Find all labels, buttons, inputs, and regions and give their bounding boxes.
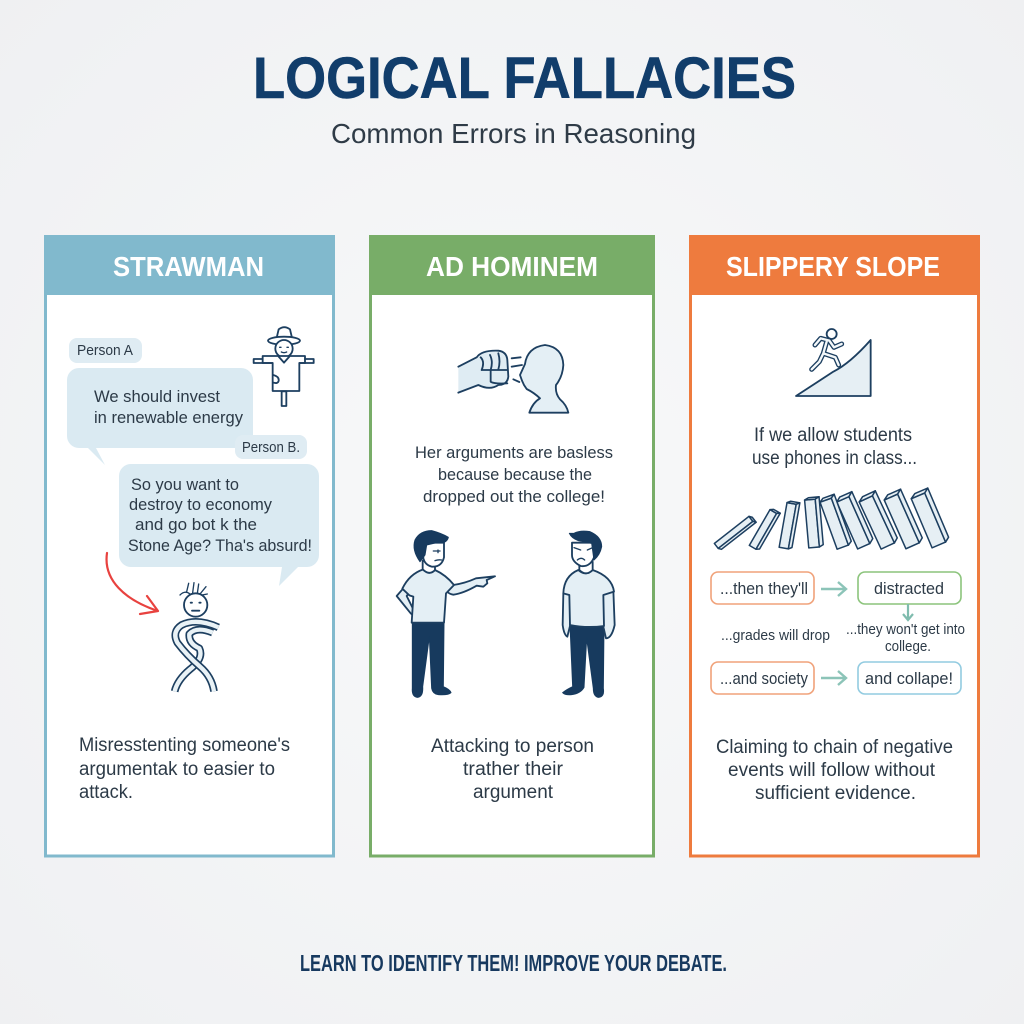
text: grades will drop: ...grades will drop (721, 627, 830, 644)
description: strawman: attack. (79, 782, 133, 803)
description: strawman: argumentak to easier to (79, 759, 275, 780)
speech bubble: person B: So you want to (131, 475, 239, 494)
description: slippery slope (716, 737, 953, 804)
chain box: then they'll: ...then they'll (720, 579, 808, 598)
label: person B: Person B. (242, 439, 300, 456)
panel header: slippery slope (689, 235, 980, 295)
quote text (752, 425, 917, 469)
heading: ad hominem: AD HOMINEM (426, 251, 598, 282)
label: person B (235, 435, 307, 459)
arrow: red curve to straw figure (107, 553, 158, 614)
icon: falling dominoes (714, 488, 950, 551)
chain box: then they'll (711, 572, 814, 604)
arrow: then to distracted (821, 582, 846, 596)
panel body: slippery slope (690, 236, 978, 856)
description: strawman: Misresstenting someone's (79, 735, 290, 756)
title: LOGICAL FALLACIES (253, 46, 796, 111)
text: they won't get into college: college. (885, 638, 931, 655)
description: ad hominem (431, 736, 594, 803)
quote text: dropped out the college! (423, 487, 605, 506)
speech bubble: person B (119, 464, 319, 586)
arrow: distracted down (903, 604, 913, 620)
panel body: ad hominem (370, 236, 654, 856)
icon: scarecrow (254, 327, 314, 406)
quote text: Her arguments are basless (415, 443, 613, 462)
description: ad hominem: argument (473, 782, 554, 803)
icon: runner on slope (796, 329, 871, 396)
panel: ad hominem (369, 235, 655, 856)
quote text: use phones in class... (752, 448, 917, 469)
chain box: and society (711, 662, 814, 694)
description: ad hominem: Attacking to person (431, 736, 594, 757)
panel header: ad hominem (369, 235, 655, 295)
icon: fist hitting head (458, 345, 568, 413)
text: they won't get into college (846, 621, 965, 655)
label: person A: Person A (77, 342, 133, 359)
description: slippery slope: events will follow without (728, 760, 936, 781)
label: person A (69, 338, 142, 363)
heading: slippery slope: SLIPPERY SLOPE (726, 251, 940, 282)
panel: slippery slope (689, 235, 980, 856)
quote text: because because the (438, 465, 592, 484)
quote text (415, 443, 613, 506)
description: slippery slope: sufficient evidence. (755, 783, 916, 804)
text: they won't get into college: ...they won't get into (846, 621, 965, 638)
heading: strawman: STRAWMAN (113, 251, 264, 282)
arrow: society to collapse (821, 671, 846, 685)
panel header: strawman (44, 235, 335, 295)
figure: target man frowning (563, 531, 615, 697)
subtitle: Common Errors in Reasoning (331, 118, 696, 149)
chain box: and society: ...and society (720, 669, 808, 688)
description: ad hominem: trather their (463, 759, 564, 780)
panel: strawman (44, 235, 335, 856)
description: strawman (79, 735, 290, 803)
speech bubble: person A: in renewable energy (94, 408, 243, 427)
chain box: distracted (858, 572, 961, 604)
description: slippery slope: Claiming to chain of negative (716, 737, 953, 758)
speech bubble: person B: Stone Age? Tha's absurd! (128, 536, 312, 555)
speech bubble: person B: destroy to economy (129, 495, 272, 514)
speech bubble: person A: We should invest (94, 387, 220, 406)
footer tagline: LEARN TO IDENTIFY THEM! IMPROVE YOUR DEBATE. (300, 950, 727, 976)
speech bubble: person B: and go bot k the (135, 515, 257, 534)
chain box: collapse: and collape! (865, 669, 953, 688)
icon: twisted straw figure (175, 583, 218, 691)
chain box: distracted: distracted (874, 579, 944, 598)
figure: accusing man pointing (397, 531, 495, 697)
chain box: collapse (858, 662, 961, 694)
quote text: If we allow students (754, 425, 912, 446)
panel body: strawman (46, 236, 334, 856)
speech bubble: person A (67, 368, 253, 465)
